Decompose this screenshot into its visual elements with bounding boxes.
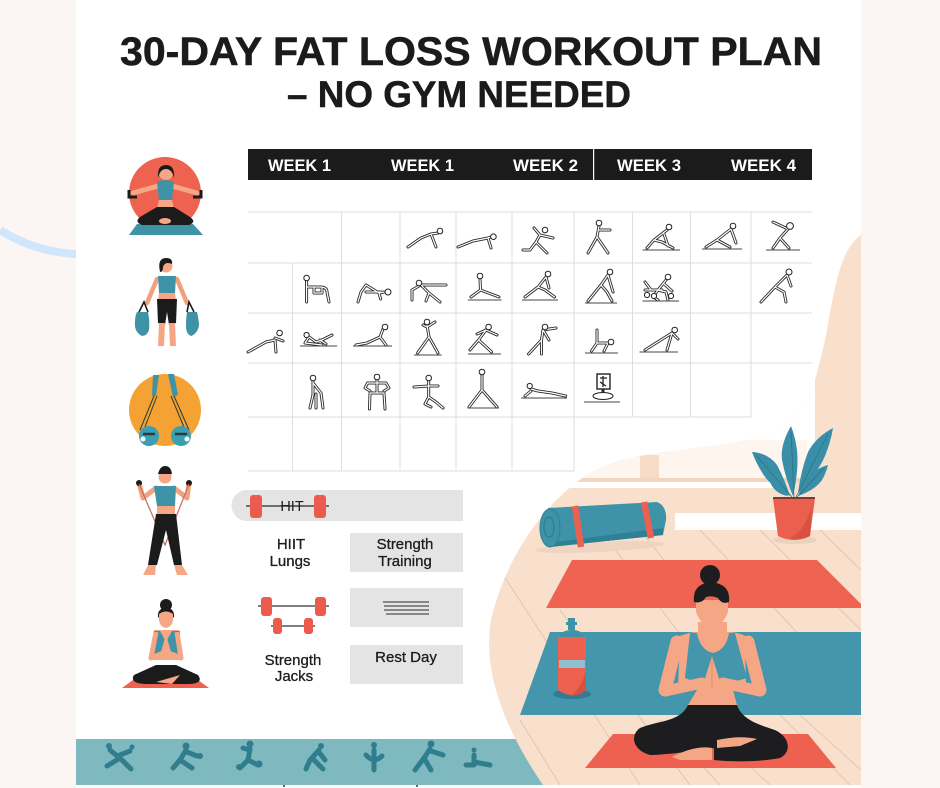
legend: HIT pill with barbell <box>231 490 463 521</box>
red mat, back <box>546 560 861 608</box>
water bottle <box>553 618 591 699</box>
legend: Strength Training box: Strength <box>377 536 433 553</box>
legend: Strength Training box <box>350 533 463 572</box>
left illustration: meditating woman on red mat <box>122 599 209 688</box>
title: – NO GYM NEEDED <box>287 74 631 115</box>
week header bar: WEEK 3 <box>617 156 681 175</box>
left illustration: woman with resistance band <box>136 466 192 575</box>
week header bar: WEEK 2 <box>513 156 578 175</box>
legend: Strength Training box: Training <box>378 553 432 570</box>
title: 30-DAY FAT LOSS WORKOUT PLAN <box>120 30 822 74</box>
decorative blue arc <box>0 230 76 254</box>
room background <box>480 230 861 786</box>
legend: Strength Jacks label: Strength <box>265 652 321 669</box>
right scene: room with yoga woman <box>480 230 861 786</box>
legend: Strength Jacks label: Jacks <box>275 668 313 685</box>
workout calendar grid <box>248 212 812 471</box>
exercise icons row 2 <box>304 269 792 303</box>
left illustration: seated woman with dumbbells on red circle <box>129 157 203 235</box>
legend: Rest Day box <box>350 645 463 684</box>
week header bar: WEEK 4 <box>731 156 797 175</box>
left illustration: resistance bands on orange circle <box>129 374 201 446</box>
yoga woman <box>634 565 788 761</box>
exercise icons row 3 <box>248 319 678 355</box>
title <box>120 30 822 115</box>
teal mat <box>520 632 861 715</box>
week header bar: WEEK 1 <box>268 156 331 175</box>
legend: HIT pill with barbell: HIT <box>280 499 304 515</box>
legend: Rest Day box: Rest Day <box>375 649 437 666</box>
red mat, front <box>585 734 836 768</box>
legend: HIIT Lungs label: Lungs <box>270 553 310 570</box>
bottom teal band with exercise silhouettes <box>76 739 556 785</box>
potted plant <box>752 426 833 544</box>
tiny marks at the bottom edge <box>283 785 418 787</box>
exercise icons row 4 <box>310 369 620 409</box>
exercise icons row 1 <box>408 220 800 253</box>
rolled teal mat <box>535 502 666 555</box>
legend: HIIT Lungs label: HIIT <box>277 536 305 553</box>
legend: lines box <box>350 588 463 627</box>
week header bar: WEEK 1 <box>391 156 454 175</box>
week header bar <box>248 149 812 180</box>
legend: barbells icon <box>258 597 329 634</box>
left illustration: standing woman with teal bags <box>135 258 199 346</box>
